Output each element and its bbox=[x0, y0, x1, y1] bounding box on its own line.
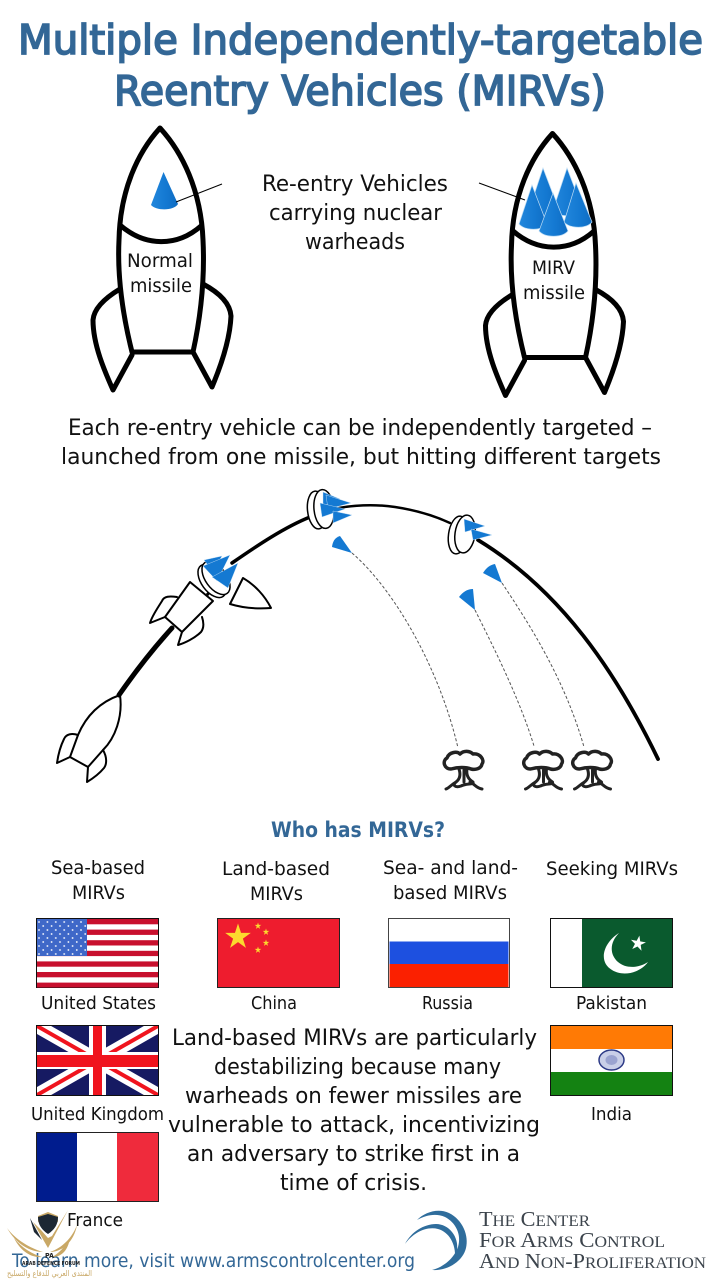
label: normal missile: missile bbox=[130, 275, 192, 297]
free re-entry vehicles bbox=[332, 536, 502, 610]
warhead bus 3 bbox=[446, 514, 492, 555]
callout: re-entry vehicles: Re-entry Vehicles bbox=[262, 172, 448, 197]
column heading: sea- and land-based: Sea- and land- bbox=[383, 857, 518, 879]
pointer line to single warhead bbox=[176, 184, 222, 202]
footer link text: To learn more, visit www.armscontrolcenter.org bbox=[11, 1250, 415, 1272]
watermark: arab defence forum logo: المنتدى العربي للدفاع والتسليح bbox=[7, 1269, 92, 1278]
label: China: China bbox=[251, 993, 297, 1014]
rocket outline: MIRV missile bbox=[486, 134, 624, 396]
flag: China bbox=[218, 918, 340, 988]
heading: who has MIRVs: Who has MIRVs? bbox=[271, 818, 445, 842]
logo wordmark: THE CENTER bbox=[479, 1207, 590, 1231]
callout: re-entry vehicles: carrying nuclear bbox=[269, 201, 443, 226]
paragraph: land-based MIRVs destabilizing: time of crisis. bbox=[280, 1171, 427, 1196]
flag: United States bbox=[36, 918, 158, 988]
paragraph: land-based MIRVs destabilizing: vulnerable to attack, incentivizing bbox=[168, 1113, 540, 1138]
callout: re-entry vehicles: warheads bbox=[305, 230, 405, 255]
paragraph: land-based MIRVs destabilizing: destabilizing because many bbox=[214, 1055, 501, 1080]
title bbox=[18, 16, 703, 115]
watermark: arab defence forum logo bbox=[7, 1210, 92, 1278]
logo: center for arms control bbox=[405, 1207, 706, 1273]
column heading: sea-based: MIRVs bbox=[72, 882, 125, 904]
column heading: sea-based bbox=[51, 857, 145, 904]
normal missile diagram bbox=[93, 128, 231, 390]
ballistic trajectory arc bbox=[119, 505, 658, 759]
label: France: France bbox=[67, 1210, 123, 1231]
rocket outline: normal missile bbox=[93, 128, 231, 390]
column heading: seeking MIRVs: Seeking MIRVs bbox=[546, 858, 678, 880]
MIRV missile diagram bbox=[479, 134, 624, 396]
paragraph: land-based MIRVs destabilizing: an adversary to strike first in a bbox=[187, 1142, 520, 1167]
flag: France bbox=[36, 1132, 158, 1202]
flag: India bbox=[550, 1026, 672, 1096]
label: Pakistan: Pakistan bbox=[576, 993, 647, 1014]
explanatory text: independently targeted: Each re-entry vehicle can be independently targeted – bbox=[68, 416, 652, 441]
icon: single re-entry vehicle cone bbox=[151, 172, 178, 209]
warhead bus 2 bbox=[306, 489, 352, 530]
watermark: arab defence forum logo: PA bbox=[45, 1252, 54, 1260]
callout: re-entry vehicles bbox=[262, 172, 448, 255]
paragraph: land-based MIRVs destabilizing: warheads on fewer missiles are bbox=[185, 1084, 522, 1109]
label: MIRV missile: MIRV bbox=[532, 257, 575, 279]
label: normal missile: Normal bbox=[127, 250, 193, 272]
flag: Pakistan bbox=[550, 918, 672, 988]
icon: mushroom clouds bbox=[444, 751, 611, 789]
first stage rocket bbox=[57, 695, 121, 782]
column heading: land-based: MIRVs bbox=[250, 883, 303, 905]
column heading: sea-based: Sea-based bbox=[51, 857, 145, 879]
label: MIRV missile bbox=[523, 257, 585, 304]
paragraph: land-based MIRVs destabilizing: Land-based MIRVs are particularly bbox=[172, 1026, 537, 1051]
label: India: India bbox=[591, 1104, 632, 1125]
explanatory text: independently targeted: launched from one missile, but hitting different targets bbox=[61, 445, 661, 470]
column heading: land-based bbox=[222, 858, 330, 905]
column headings bbox=[51, 857, 678, 905]
second stage with separating nose cone bbox=[150, 578, 271, 645]
label: Russia: Russia bbox=[422, 993, 473, 1014]
trajectory diagram bbox=[57, 489, 658, 789]
flag: Russia bbox=[388, 918, 510, 988]
logo mark: swoosh bbox=[405, 1211, 467, 1270]
column heading: sea- and land-based bbox=[383, 857, 518, 904]
dashed flight paths bbox=[352, 553, 584, 748]
label: United Kingdom: United Kingdom bbox=[31, 1104, 164, 1125]
explanatory text: independently targeted bbox=[61, 416, 661, 470]
column heading: land-based: Land-based bbox=[222, 858, 330, 880]
icon: five re-entry vehicle cones bbox=[519, 168, 592, 236]
logo wordmark bbox=[479, 1207, 706, 1273]
title: Reentry Vehicles (MIRVs) bbox=[114, 67, 606, 115]
logo wordmark: AND NON-PROLIFERATION bbox=[479, 1249, 706, 1273]
label: United States: United States bbox=[41, 993, 156, 1014]
watermark: arab defence forum logo: ARAB DEFENCE FORUM bbox=[22, 1261, 80, 1267]
label: normal missile bbox=[127, 250, 193, 297]
column heading: sea- and land-based: based MIRVs bbox=[393, 882, 507, 904]
title: Multiple Independently-targetable bbox=[18, 16, 703, 64]
flag: United Kingdom bbox=[36, 1026, 158, 1096]
label: MIRV missile: missile bbox=[523, 282, 585, 304]
logo wordmark: FOR ARMS CONTROL bbox=[479, 1228, 665, 1252]
warhead bus 1 bbox=[192, 555, 238, 603]
pointer line to MIRV warheads bbox=[479, 183, 525, 200]
paragraph: land-based MIRVs destabilizing bbox=[168, 1026, 540, 1196]
